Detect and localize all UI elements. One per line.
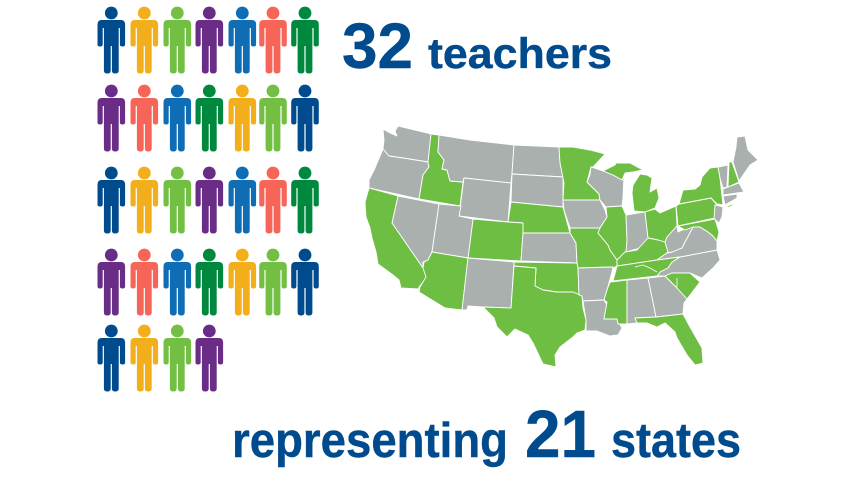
person icon row 4	[98, 249, 319, 316]
person icon row 2	[98, 85, 319, 152]
caption: representing 21 states: states	[611, 414, 741, 468]
heading: 32 teachers	[342, 10, 612, 82]
person icon row 1	[98, 7, 319, 74]
person icon row 3	[98, 167, 319, 234]
heading: 32 teachers: teachers	[428, 30, 612, 78]
map: United States with 21 highlighted states	[365, 126, 758, 367]
people pictogram: 32 teachers	[98, 7, 319, 391]
heading: 32 teachers: 32	[342, 10, 413, 82]
caption: representing 21 states	[232, 397, 741, 472]
person icon row 5	[98, 325, 223, 392]
caption: representing 21 states: 21	[525, 397, 596, 472]
caption: representing 21 states: representing	[232, 414, 508, 468]
